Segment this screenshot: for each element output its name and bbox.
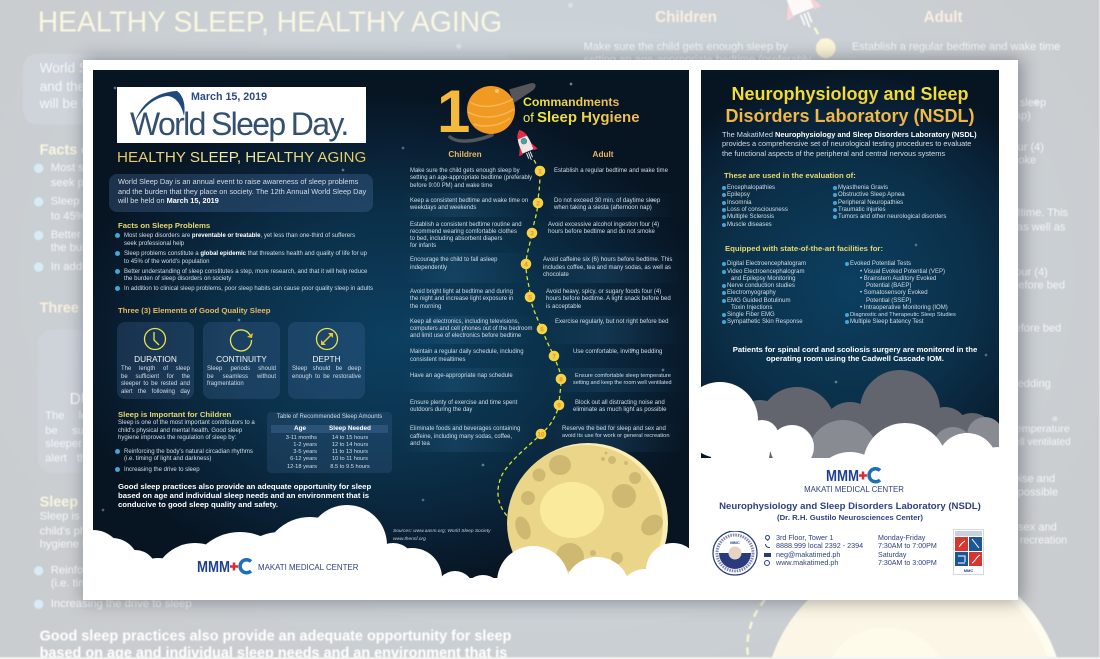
- white poster card: [83, 60, 1018, 600]
- adult commandments list: Avoid excessive alcohol ingestion four (4): [548, 222, 659, 228]
- heading: facts on sleep problems: Facts on Sleep Problems: [118, 221, 210, 230]
- neurosciences center subtitle: (Dr. R.H. Gustilo Neurosciences Center): [777, 513, 923, 522]
- background: enlarged faded copy of the left panel: avoid its use for work or general recreation: [867, 537, 1067, 548]
- icon: clock: [144, 328, 166, 350]
- table: recommended sleep amounts: Sleep Needed: [329, 425, 371, 432]
- facilities list, column 1: Single Fiber EMG: [727, 312, 775, 318]
- evaluation list, column 2: Traumatic injuries: [838, 207, 886, 213]
- background: enlarged faded copy of the left panel: (i.e. timing of light and darkness): [51, 580, 214, 591]
- source credit: www.thensf.org: [393, 537, 426, 542]
- table: recommended sleep amounts: Age: [294, 425, 306, 432]
- children commandments list: to bed, including absorbent diapers: [410, 236, 502, 242]
- card: continuity: CONTINUITY: [216, 354, 267, 364]
- facts bullet list: the burden of sleep disorders on society: [124, 276, 231, 282]
- background: enlarged faded copy of the left panel: Block out all distracting noise and: [891, 475, 1055, 486]
- dashed rocket trail with numbered steps: 1: [538, 168, 542, 176]
- intro text panel: World Sleep Day is an annual event to raise awareness of sleep problems: [118, 177, 358, 186]
- adult commandments list: chocolate: [543, 272, 569, 278]
- background: enlarged faded copy of the left panel: setting and keep the room well ventilated: [888, 438, 1071, 449]
- children bullet list: Reinforcing the body's natural circadian rhythms: [124, 449, 253, 455]
- children sleep paragraph: hygiene improves the regulation of sleep by:: [118, 435, 236, 441]
- heading: evaluation: These are used in the evaluation of:: [724, 171, 856, 180]
- background: enlarged faded copy of the left panel: and the burden that they place on society. The 12th Annual World Sleep Day: [40, 78, 502, 95]
- children bullet list: Increasing the drive to sleep: [124, 467, 200, 473]
- table: recommended sleep amounts: 12-18 years: [287, 464, 317, 470]
- card: duration: sleeper to be rested and: [121, 381, 190, 387]
- background: enlarged faded copy of the left panel: Do not exceed 30 min. of daytime sleep: [852, 99, 1046, 110]
- children commandments list: and tea: [410, 441, 430, 447]
- panel: Neurophysiology and Sleep Disorders Laboratory: [701, 70, 999, 576]
- adult commandments list: Reserve the bed for sleep and sex and: [562, 426, 666, 432]
- children commandments list: Eliminate foods and beverages containing: [410, 426, 520, 432]
- contact details: www.makatimed.ph: [776, 558, 838, 567]
- evaluation list, column 2: Obstructive Sleep Apnea: [838, 192, 905, 198]
- adult commandments list: Avoid caffeine six (6) hours before bedtime. This: [543, 257, 672, 263]
- background: enlarged faded copy of the left panel: Facts on Sleep Problems: [40, 142, 212, 158]
- facilities list, column 2: • Intraoperative Monitoring (IOM): [860, 305, 948, 311]
- background: enlarged faded copy of the left panel: Ensure comfortable sleep temperature: [891, 425, 1070, 436]
- children sleep paragraph: child's physical and mental health. Good sleep: [118, 428, 242, 434]
- facilities list, column 2: • Somatosensory Evoked: [860, 290, 928, 296]
- table: recommended sleep amounts: 12 to 14 hours: [332, 442, 368, 448]
- clinic hours: Saturday: [878, 551, 906, 559]
- title: Disorders Laboratory (NSDL): [725, 106, 975, 126]
- children commandments list: Have an age-appropriate nap schedule: [410, 373, 513, 379]
- background: enlarged faded copy of the left panel: World Sleep Day is an annual event to raise awareness of sleep problems: [40, 60, 488, 77]
- background: enlarged faded copy of the left panel: Sleep is Important for Children: [40, 494, 251, 511]
- intro paragraph: The MakatiMed Neurophysiology and Sleep Disorders Laboratory (NSDL): [722, 130, 977, 139]
- closing statement: conducive to good sleep quality and safety.: [118, 500, 278, 509]
- intro paragraph: provides a comprehensive set of neurological testing procedures to evaluate: [722, 139, 971, 148]
- background: enlarged faded copy of the left panel: eliminate as much light as possible: [888, 488, 1058, 499]
- swoosh arc: [136, 91, 185, 121]
- laboratory name: Neurophysiology and Sleep Disorders Laboratory (NSDL): [719, 501, 981, 512]
- callout: patients monitoring: Patients for spinal cord and scoliosis surgery are monitored in the: [733, 345, 977, 354]
- dashed rocket trail with numbered steps: 7: [552, 354, 556, 360]
- background: enlarged faded copy of the left panel: Increasing the drive to sleep: [51, 600, 192, 611]
- intro paragraph: the functional aspects of the peripheral and central nervous systems: [722, 149, 945, 158]
- children bullet list: [115, 448, 253, 473]
- facts bullet list: to 45% of the world's population: [124, 259, 210, 265]
- background: enlarged faded copy of the left panel: Sleep problems constitute a global epidemic that threatens health and quality of life for up: [51, 198, 504, 209]
- table: recommended sleep amounts: 3-11 months: [286, 435, 317, 441]
- background: enlarged faded copy of the left panel: sleeper to be rested and: [45, 440, 174, 451]
- card: duration: [117, 322, 194, 399]
- title: [701, 83, 999, 126]
- children commandments list: and limit use of electronics before bedtime: [410, 333, 521, 339]
- Makati Medical Center logo mark: [826, 467, 882, 484]
- logo wordmark: MAKATI MEDICAL CENTER: [804, 485, 904, 494]
- adult commandments list: Establish a regular bedtime and wake time: [554, 168, 668, 174]
- evaluation list, column 1: Muscle diseases: [727, 222, 772, 228]
- background: enlarged faded copy of the left panel: is acceptable: [837, 296, 902, 308]
- closing statement: based on age and individual sleep needs and an environment that is: [118, 491, 369, 500]
- children commandments list: computers and cell phones out of the bedroom: [410, 326, 532, 332]
- table: recommended sleep amounts: 8.5 to 9.5 hours: [330, 464, 370, 470]
- heading: 10 commandments of sleep hygiene: Sleep Hygiene: [537, 109, 640, 126]
- card: continuity: Sleep periods should: [207, 366, 276, 372]
- intro text panel: will be held on March 15, 2019: [118, 196, 219, 205]
- heading: three elements: Three (3) Elements of Good Quality Sleep: [118, 306, 270, 315]
- background: enlarged faded copy of the left panel: Adult: [924, 9, 963, 26]
- adult commandments list: eliminate as much light as possible: [573, 407, 666, 413]
- clinic hours: 7:30AM to 7:00PM: [878, 542, 937, 550]
- evaluation list, column 1: Epilepsy: [727, 192, 750, 198]
- children commandments list: Keep all electronics, including televisions,: [410, 319, 519, 325]
- World Sleep Day logo banner: [117, 87, 366, 143]
- background: enlarged faded copy of the left panel: Avoid excessive alcohol ingestion four (4): [841, 144, 1044, 155]
- adult commandments list: Use comfortable, inviting bedding: [573, 349, 662, 355]
- background: enlarged faded copy of the left panel: In addition to clinical sleep problems, poor sleep habits can cause poor quality sleep in adults: [51, 263, 515, 274]
- children commandments list: Make sure the child gets enough sleep by: [410, 168, 520, 174]
- background: enlarged faded copy of the left panel: Exercise regularly, but not right before bed: [854, 324, 1062, 335]
- background: enlarged faded copy of the left panel: DURATION: [70, 389, 150, 408]
- background: enlarged faded copy of the left panel: Reinforcing the body's natural circadian rhythms: [51, 566, 291, 578]
- clouds: grey and white layers: [701, 370, 999, 465]
- children bullet list: (i.e. timing of light and darkness): [124, 456, 211, 462]
- card: depth: DEPTH: [312, 354, 341, 364]
- background: enlarged faded copy of the left panel: to 45% of the world's population: [51, 213, 210, 224]
- card: duration: DURATION: [134, 354, 177, 364]
- dashed rocket trail with numbered steps: 9: [557, 402, 561, 410]
- adult commandments list: Do not exceed 30 min. of daytime sleep: [554, 198, 660, 204]
- adult commandments list: Avoid heavy, spicy, or sugary foods four (4): [546, 289, 661, 295]
- evaluation list, column 1: Insomnia: [727, 200, 752, 206]
- card: continuity: be seamless without: [207, 374, 276, 380]
- intro text panel: [109, 174, 373, 212]
- icon: laboratory seal: MMC: [730, 540, 740, 545]
- facilities list, column 1: Sympathetic Skin Response: [727, 319, 803, 325]
- children commandments list: the morning: [410, 304, 441, 310]
- facilities list, column 1: Video Electroencephalogram: [727, 269, 805, 275]
- title: HEALTHY SLEEP, HEALTHY AGING: [117, 149, 366, 166]
- adult commandments list: hours before bedtime. A light snack before bed: [546, 296, 671, 302]
- contact details: [764, 533, 863, 567]
- background: enlarged faded copy of the left panel: will be held on March 15, 2019: [40, 95, 228, 112]
- children commandments list: setting an age-appropriate bedtime (preferably: [410, 175, 532, 181]
- table: recommended sleep amounts: 1-2 years: [293, 442, 317, 448]
- card: depth: Sleep should be deep: [292, 366, 361, 372]
- dashed rocket trail with numbered steps: 6: [540, 326, 544, 334]
- evaluation list, column 2: Tumors and other neurological disorders: [838, 214, 946, 220]
- facts bullet list: Better understanding of sleep constitutes a step, more research, and that it will help reduce: [124, 269, 367, 275]
- table: recommended sleep amounts: 6-12 years: [290, 456, 317, 462]
- background: enlarged faded copy of the left panel: Establish a regular bedtime and wake time: [852, 43, 1061, 54]
- card: depth: [288, 322, 365, 399]
- adult commandments list: is acceptable: [546, 304, 581, 310]
- background: enlarged faded copy of the left panel: Better understanding of sleep constitutes a step, more research, and that it will help reduce: [51, 231, 504, 242]
- children commandments list: Maintain a regular daily schedule, including: [410, 349, 524, 355]
- card: continuity: [203, 322, 280, 399]
- facilities list, column 2: Potential (BAEP): [866, 283, 911, 289]
- contact details: 8888.999 local 2392 - 2394: [776, 541, 863, 550]
- contact details: 3rd Floor, Tower 1: [776, 533, 833, 542]
- adult commandments list: when taking a siesta (afternoon nap): [554, 205, 652, 211]
- wordmark: World Sleep Day.: [130, 106, 348, 142]
- adult commandments list: [543, 168, 672, 439]
- background: enlarged faded copy of the left panel: when taking a siesta (afternoon nap): [852, 112, 1031, 123]
- facilities list, column 1: Toxin Injections: [731, 305, 772, 311]
- evaluation list, column 1: Loss of consciousness: [727, 207, 788, 213]
- facilities list, column 2: Diagnostic and Therapeutic Sleep Studies: [850, 312, 956, 318]
- dashed rocket trail with numbered steps: 8: [559, 376, 563, 384]
- children commandments list: independently: [410, 265, 447, 271]
- closing statement: Good sleep practices also provide an adequate opportunity for sleep: [118, 482, 371, 491]
- illustration: moon with craters: [507, 443, 668, 576]
- children commandments list: Encourage the child to fall asleep: [410, 257, 497, 263]
- title: Neurophysiology and Sleep: [731, 84, 969, 104]
- children commandments list: for infants: [410, 243, 436, 249]
- clinic hours: [878, 534, 937, 567]
- logo mark: [197, 558, 252, 575]
- dashed rocket trail with numbered steps: 4: [524, 262, 528, 268]
- card: duration: be sufficient for the: [121, 374, 190, 380]
- heading: sleep for children: Sleep is Important for Children: [118, 410, 231, 419]
- children commandments list: before 9:00 PM) and wake time: [410, 183, 493, 189]
- background: enlarged faded copy of the left panel: seek professional help: [51, 179, 163, 190]
- dashed rocket trail with numbered steps: [497, 160, 566, 516]
- facilities list, column 2: Potential (SSEP): [866, 298, 911, 304]
- Makati Medical Center logo: [197, 558, 358, 575]
- adult commandments list: Exercise regularly, but not right before bed: [555, 319, 668, 325]
- facilities list, column 1: Nerve conduction studies: [727, 283, 795, 289]
- background: enlarged faded copy of the left panel: hygiene improves the regulation of sleep by:: [40, 540, 260, 552]
- background: enlarged faded copy of the left panel: Three (3) Elements of Good Quality Sleep: [40, 300, 324, 317]
- date: March 15, 2019: [191, 91, 267, 103]
- background: enlarged faded copy of the left panel: Good sleep practices also provide an adequate opportunity for sleep: [40, 628, 512, 645]
- children sleep paragraph: [118, 420, 255, 441]
- children commandments list: caffeine, including many sodas, coffee,: [410, 434, 512, 440]
- background: enlarged faded copy of the left panel: before 9:00 PM) and wake time: [584, 71, 738, 82]
- clinic hours: 7:30AM to 3:00PM: [878, 559, 937, 567]
- clouds along the poster bottom: [93, 505, 689, 600]
- background: enlarged faded copy of the left panel: alert the following day: [45, 455, 174, 466]
- icon: rocket: [517, 130, 538, 160]
- facilities list, column 2: • Brainstem Auditory Evoked: [860, 276, 936, 282]
- facilities list, column 2: • Visual Evoked Potential (VEP): [860, 269, 945, 275]
- adult commandments list: setting and keep the room well ventilated: [573, 380, 672, 386]
- table: recommended sleep amounts: 3-5 years: [293, 449, 317, 455]
- facts bullet list: Most sleep disorders are preventable or treatable, yet less than one-third of sufferers: [124, 233, 355, 239]
- source credit: [393, 528, 491, 542]
- background: enlarged faded copy of the left panel: the burden of sleep disorders on society: [51, 244, 251, 255]
- facts bullet list: Sleep problems constitute a global epidemic that threatens health and quality of life for up: [124, 251, 367, 257]
- heading: 10 commandments of sleep hygiene: [523, 95, 640, 126]
- facilities list, column 1: EMG Guided Botulinum: [727, 298, 791, 304]
- children sleep paragraph: Sleep is one of the most important contributors to a: [118, 420, 255, 426]
- adult commandments list: avoid its use for work or general recreation: [562, 433, 669, 439]
- adult commandments list: Ensure comfortable sleep temperature: [575, 373, 671, 379]
- table: recommended sleep amounts: [267, 412, 392, 473]
- card: duration: alert the following day: [121, 389, 190, 395]
- facilities list, column 1: [722, 260, 806, 325]
- dashed rocket trail with numbered steps: 3: [530, 230, 534, 238]
- evaluation list, column 1: Encephalopathies: [727, 185, 775, 191]
- heading: 10 commandments of sleep hygiene: Commandments: [523, 95, 619, 109]
- icon: accreditation badge: MMC: [964, 568, 973, 573]
- facilities list, column 2: Evoked Potential Tests: [850, 261, 911, 267]
- icon: circular arrow: [230, 329, 253, 352]
- evaluation list, column 1: Multiple Sclerosis: [727, 214, 774, 220]
- heading: facilities: Equipped with state-of-the-art facilities for:: [725, 244, 883, 253]
- icon: laboratory seal: [712, 531, 758, 576]
- facts bullet list: In addition to clinical sleep problems, poor sleep habits can cause poor quality sleep in adults: [124, 286, 373, 292]
- intro text panel: and the burden that they place on society. The 12th Annual World Sleep Day: [118, 187, 366, 196]
- card: depth: enough to be restorative: [292, 374, 361, 380]
- facilities list, column 2: [845, 260, 956, 325]
- contact details: neg@makatimed.ph: [776, 550, 840, 559]
- dashed rocket trail with numbered steps: 2: [536, 200, 540, 208]
- children commandments list: consistent mealtimes: [410, 357, 465, 363]
- background: enlarged faded copy of the left panel: HEALTHY SLEEP, HEALTHY AGING: [38, 8, 502, 39]
- children commandments list: Establish a consistent bedtime routine and: [410, 222, 522, 228]
- adult commandments list: includes coffee, tea and many sodas, as well as: [543, 265, 671, 271]
- adult commandments list: Block out all distracting noise and: [575, 400, 665, 406]
- table: recommended sleep amounts: 11 to 13 hours: [332, 449, 368, 455]
- facilities list, column 2: Multiple Sleep Latency Test: [850, 319, 924, 325]
- heading: adult column: Adult: [593, 150, 613, 159]
- children commandments list: the night and increase light exposure in: [410, 296, 513, 302]
- background: enlarged faded copy of the left panel: Use comfortable, inviting bedding: [888, 380, 1051, 391]
- background: enlarged faded copy of the left panel: Avoid heavy, spicy, or sugary foods four (4): [837, 268, 1048, 280]
- table: recommended sleep amounts: Table of Recommended Sleep Amounts: [277, 414, 382, 420]
- adult commandments list: hours before bedtime and do not smoke: [548, 229, 655, 235]
- icon: planet with ring and numeral 1: [438, 78, 536, 145]
- dashed rocket trail with numbered steps: 10: [537, 432, 545, 438]
- evaluation list, column 2: Peripheral Neuropathies: [838, 200, 903, 206]
- children commandments list: outdoors during the day: [410, 407, 472, 413]
- clinic hours: Monday-Friday: [878, 534, 925, 542]
- children commandments list: [410, 168, 532, 447]
- facilities list, column 1: and Epilepsy Monitoring: [731, 276, 796, 282]
- facilities list, column 1: Digital Electroencephalogram: [727, 261, 806, 267]
- heading: children column: Children: [448, 150, 482, 159]
- facts bullet list: [115, 232, 373, 292]
- icon: double arrow: [316, 328, 338, 350]
- background: enlarged faded copy of the left panel: hours before bedtime. A light snack before bed: [837, 281, 1065, 293]
- children commandments list: Keep a consistent bedtime and wake time on: [410, 198, 528, 204]
- logo wordmark: MAKATI MEDICAL CENTER: [258, 563, 358, 572]
- background: enlarged faded copy of the left panel: hours before bedtime and do not smoke: [841, 157, 1037, 168]
- table: recommended sleep amounts: 10 to 11 hours: [332, 456, 368, 462]
- card: continuity: fragmentation: [207, 381, 244, 387]
- evaluation list, column 1: [722, 184, 788, 228]
- background: enlarged faded copy of the left panel: Avoid caffeine six (6) hours before bedtime. This: [832, 209, 1068, 220]
- background: enlarged faded copy of the left panel: Children: [655, 9, 717, 26]
- table: recommended sleep amounts: 14 to 15 hours: [332, 435, 368, 441]
- children commandments list: Avoid bright light at bedtime and during: [410, 289, 513, 295]
- background: enlarged faded copy of the left panel: Make sure the child gets enough sleep by: [584, 43, 788, 54]
- background: enlarged faded copy of the left panel: Sleep is one of the most important contributors to a: [40, 512, 295, 524]
- source credit: Sources: www.aasm.org; World Sleep Society: [393, 529, 491, 534]
- children commandments list: Ensure plenty of exercise and time spent: [410, 400, 517, 406]
- children commandments list: recommend wearing comfortable clothes: [410, 229, 517, 235]
- callout: patients monitoring: [733, 345, 977, 363]
- background: enlarged faded copy of the left panel: Reserve the bed for sleep and sex and: [867, 524, 1057, 535]
- evaluation list, column 2: Myasthenia Gravis: [838, 185, 888, 191]
- children commandments list: weekdays and weekends: [410, 205, 476, 211]
- callout: patients monitoring: operating room using the Cadwell Cascade IOM.: [766, 354, 944, 363]
- panel: World Sleep Day and 10 Commandments poster: [93, 70, 689, 578]
- background: enlarged faded copy of the left panel: setting an age-appropriate bedtime (preferably: [584, 56, 811, 67]
- icon: planet with ring and numeral 1: 1: [438, 78, 470, 145]
- dashed rocket trail with numbered steps: 5: [528, 294, 532, 302]
- icon: accreditation badge: [953, 529, 984, 575]
- facts bullet list: seek professional help: [124, 241, 184, 247]
- heading: 10 commandments of sleep hygiene: of: [523, 110, 534, 125]
- facilities list, column 1: Electromyography: [727, 290, 776, 296]
- background: enlarged faded copy of the left panel: chocolate: [832, 237, 879, 248]
- background: enlarged faded copy of the left panel: child's physical and mental health. Good sleep: [40, 527, 271, 539]
- intro paragraph: [722, 130, 977, 158]
- evaluation list, column 2: [833, 184, 946, 220]
- background: enlarged faded copy of the left panel: includes coffee, tea and many sodas, as well as: [832, 224, 1066, 235]
- closing statement: [118, 482, 371, 509]
- background: enlarged faded copy of the left panel: be sufficient for the: [45, 427, 174, 438]
- background: enlarged faded copy of the left panel: Most sleep disorders are preventable or treatable, yet less than one-third of sufferers: [51, 164, 482, 175]
